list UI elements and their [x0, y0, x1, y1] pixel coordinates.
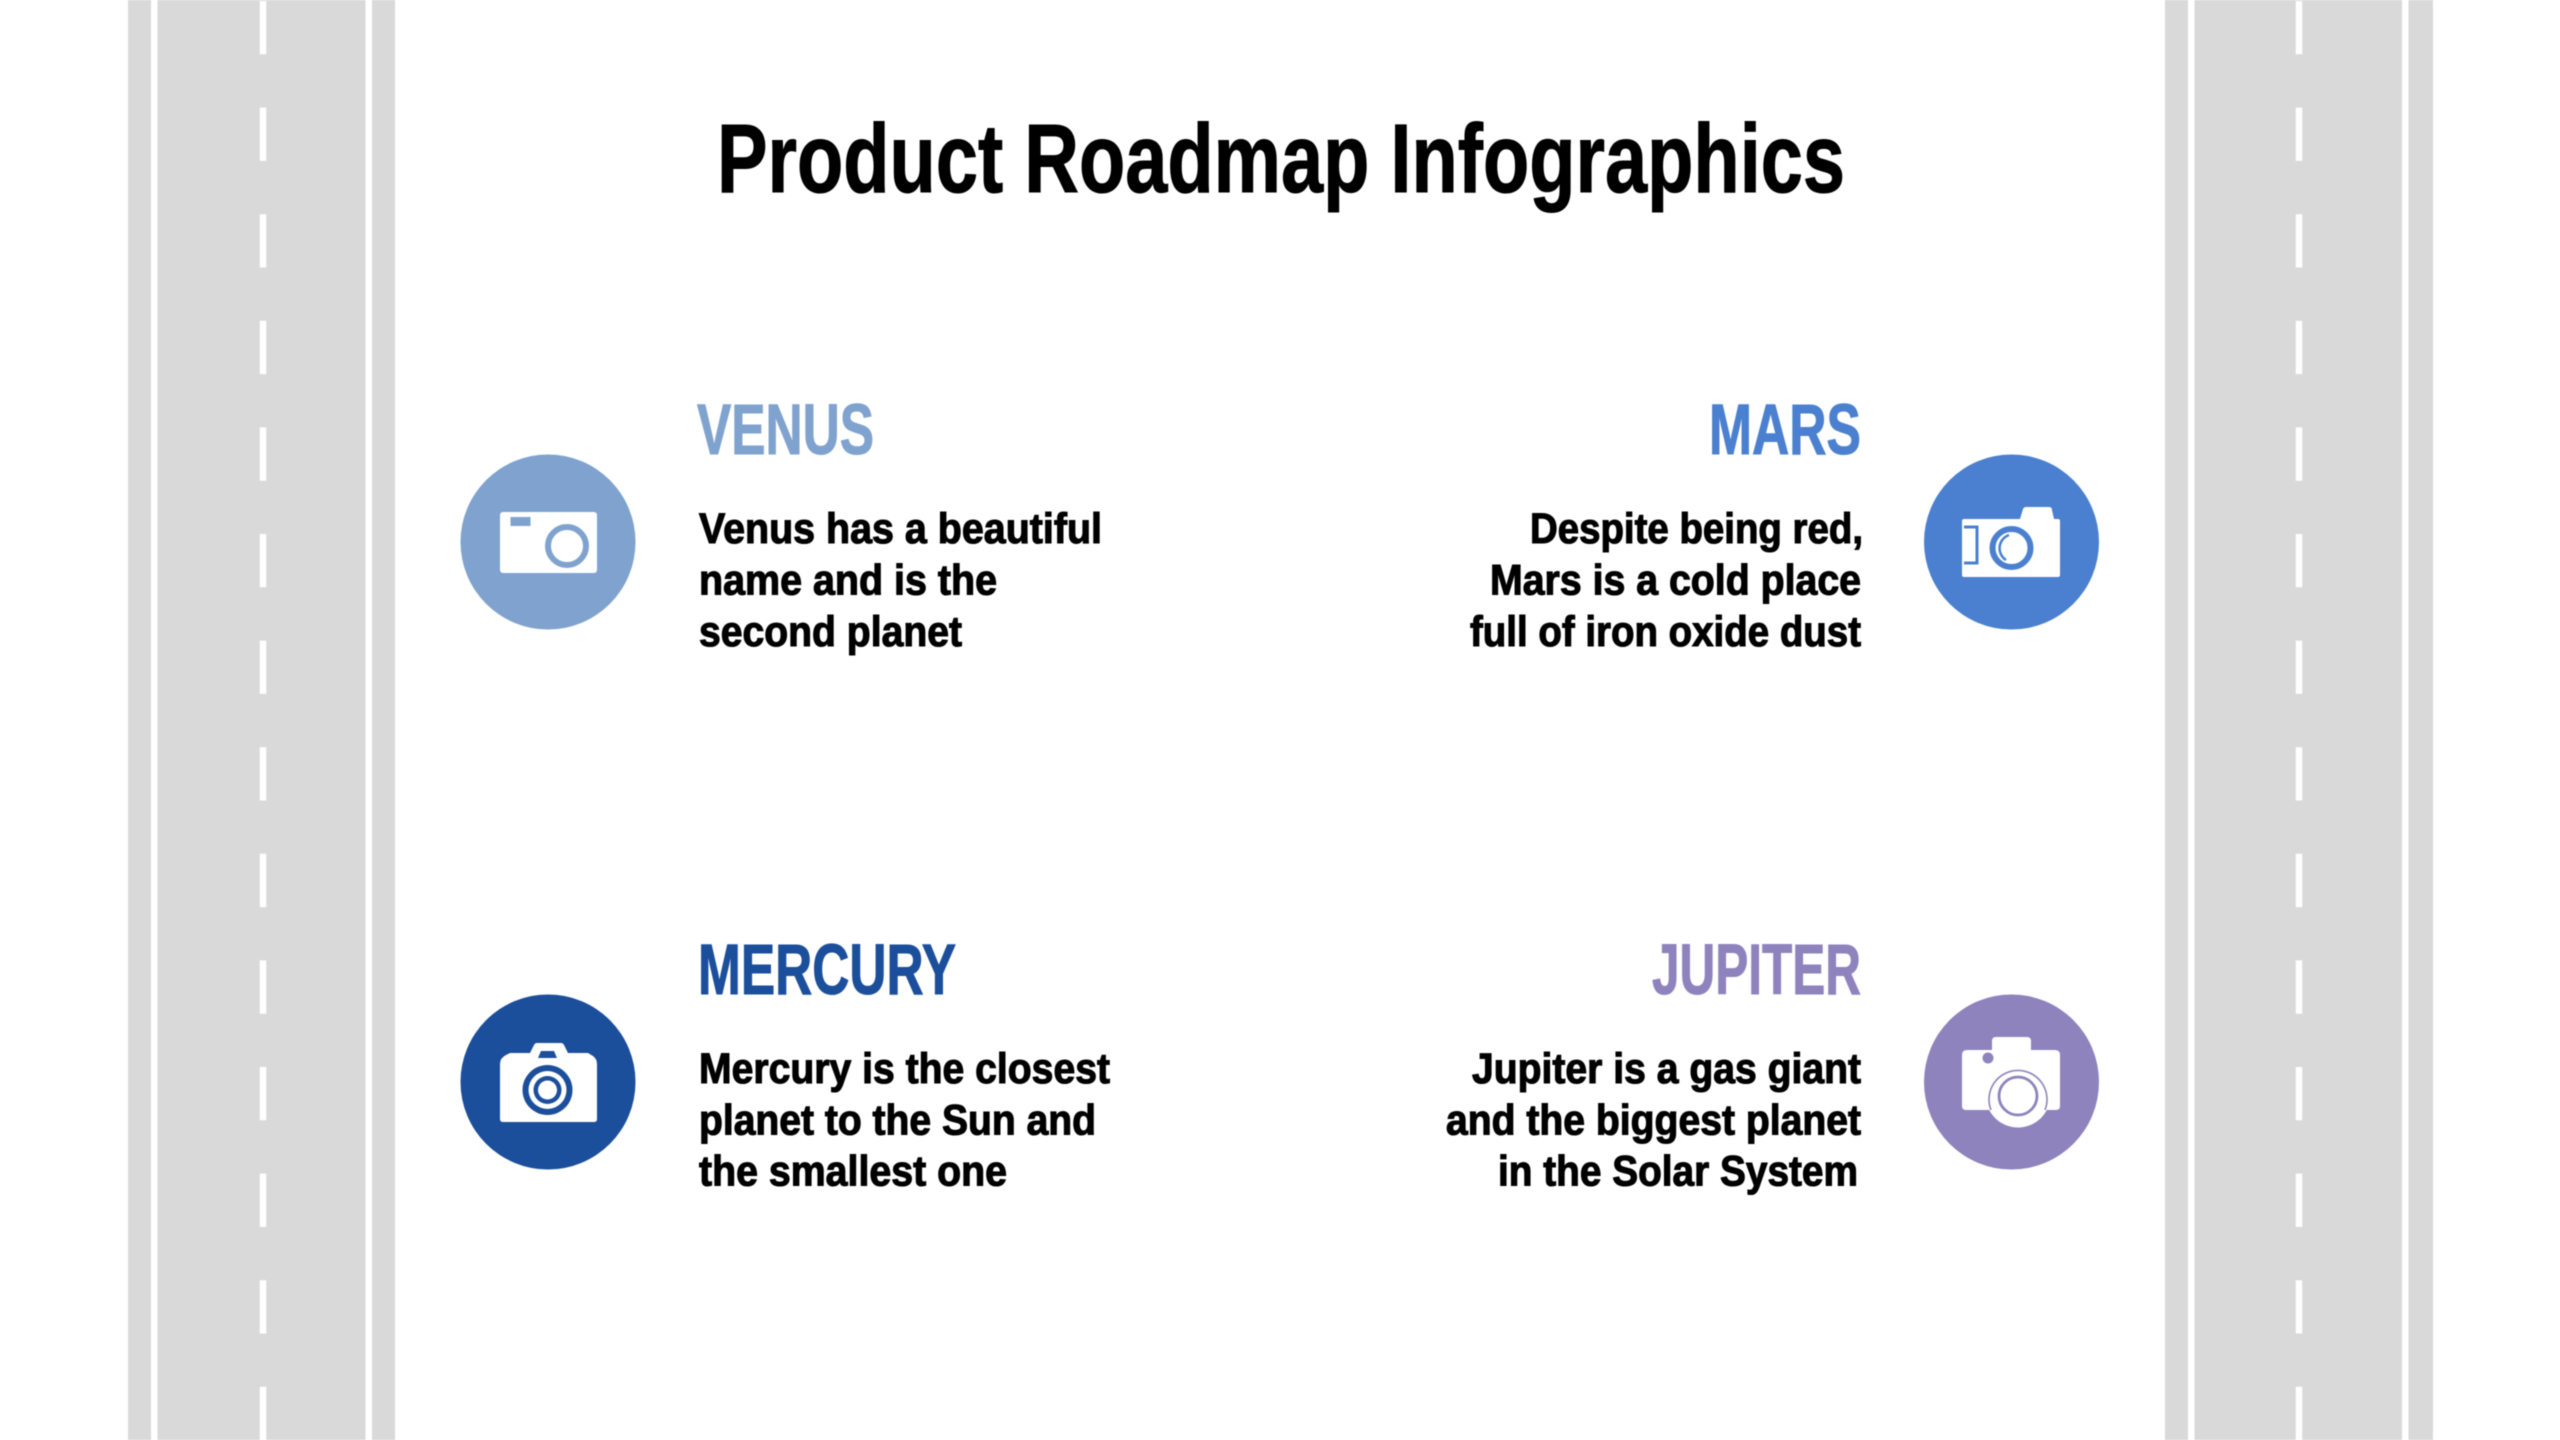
text: Venus description: name and is the: [699, 556, 997, 604]
text: Venus description: Venus has a beautiful: [699, 505, 1102, 553]
panel: Jupiter: [1446, 931, 2099, 1196]
heading: Venus: VENUS: [697, 391, 874, 470]
heading: Jupiter: JUPITER: [1652, 931, 1861, 1010]
icon: Mars camera: [1924, 454, 2099, 630]
road: right: [2165, 0, 2433, 1440]
text: Mars description: Despite being red,: [1530, 505, 1863, 553]
text: Jupiter description: and the biggest planet: [1446, 1096, 1861, 1144]
text: Jupiter description: Jupiter is a gas giant: [1472, 1045, 1861, 1093]
title: Product Roadmap Infographics: [717, 104, 1845, 213]
text: Jupiter description: [1446, 1045, 1861, 1196]
icon: Mercury camera: [460, 994, 636, 1170]
text: Mars description: Mars is a cold place: [1490, 556, 1861, 604]
heading: Mercury: MERCURY: [698, 931, 956, 1010]
text: Venus description: [699, 505, 1102, 656]
panel: Mars: [1470, 391, 2099, 656]
text: Mars description: [1470, 505, 1863, 656]
text: Jupiter description: in the Solar System: [1498, 1148, 1858, 1196]
text: Mercury description: [699, 1045, 1110, 1196]
text: Mercury description: planet to the Sun and: [699, 1096, 1096, 1144]
heading: Mars: MARS: [1709, 391, 1861, 470]
text: Mercury description: Mercury is the closest: [699, 1045, 1110, 1093]
text: Mars description: full of iron oxide dust: [1470, 608, 1861, 656]
icon: Jupiter camera: [1924, 994, 2099, 1170]
panel: Venus: [460, 391, 1102, 656]
icon: Venus camera: [460, 454, 636, 630]
road: left: [128, 0, 395, 1440]
panel: Mercury: [460, 931, 1110, 1196]
text: Mercury description: the smallest one: [699, 1148, 1007, 1196]
text: Venus description: second planet: [699, 608, 962, 656]
